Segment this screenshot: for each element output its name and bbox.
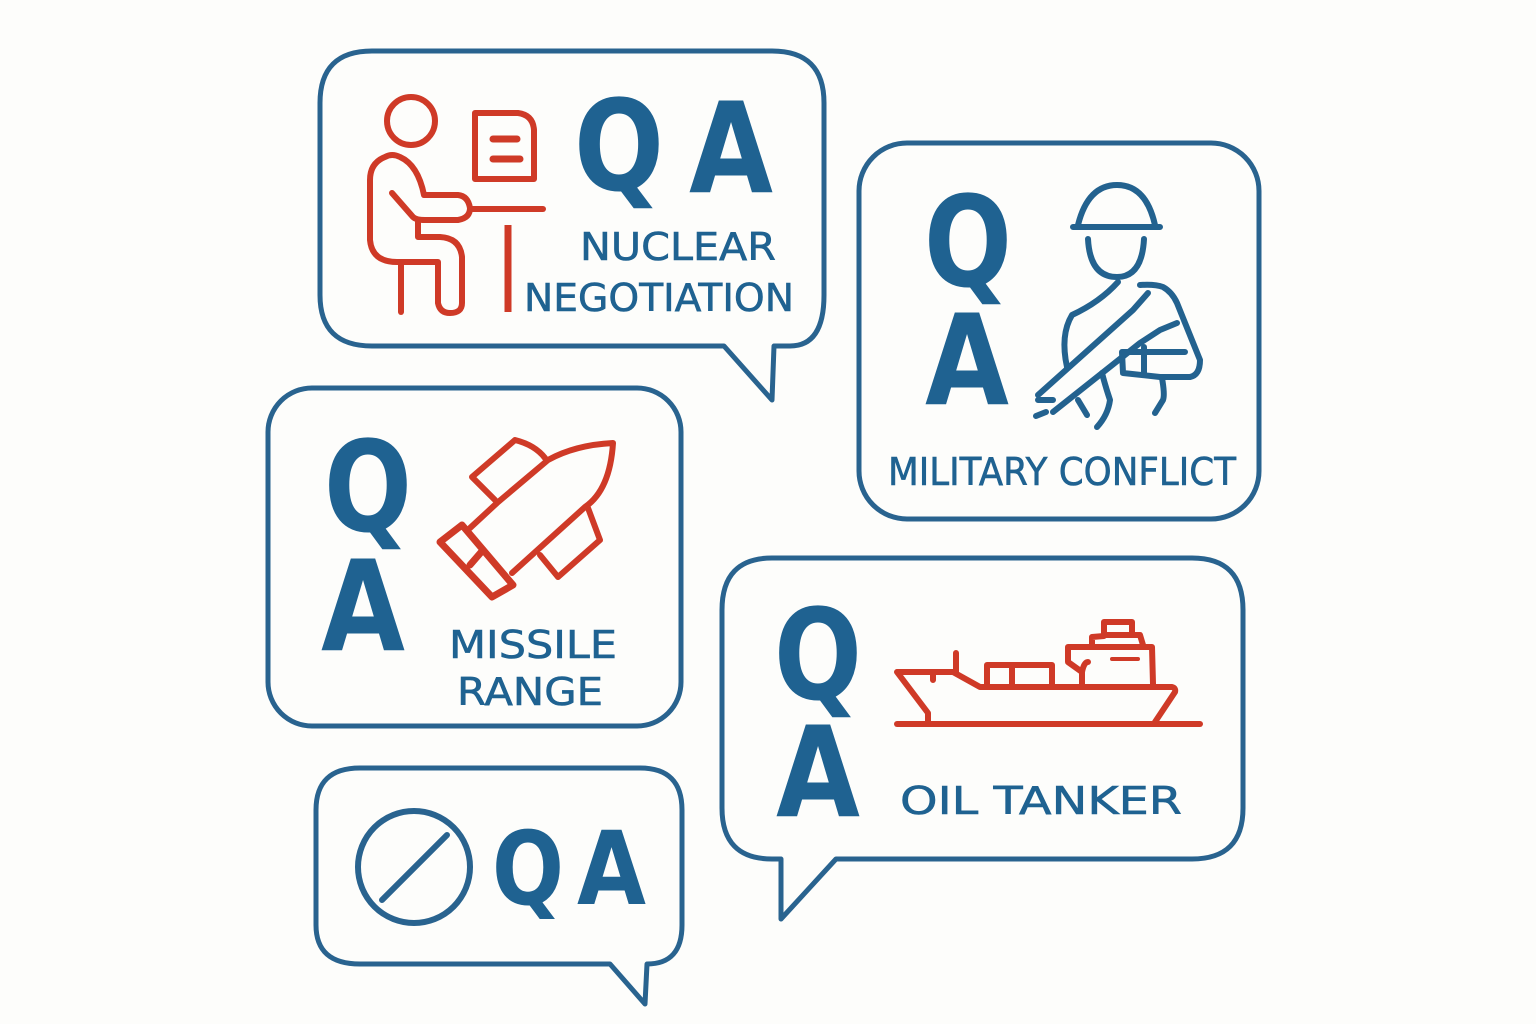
- label: nuclear negotiation: NUCLEAR: [580, 225, 776, 269]
- bubble outline: [859, 143, 1259, 519]
- label: military conflict: MILITARY CONFLICT: [888, 450, 1237, 494]
- letter A: A: [925, 287, 1009, 434]
- letter Q: Q: [774, 582, 862, 729]
- letter Q: Q: [574, 73, 664, 220]
- bubble outline: [316, 768, 682, 1004]
- letter A: A: [577, 810, 646, 929]
- label: missile range: [449, 623, 617, 714]
- letter Q: Q: [924, 169, 1012, 316]
- panel: oil tanker: [722, 558, 1243, 919]
- letter Q: Q: [324, 414, 412, 561]
- icon: soldier with rifle: [1036, 185, 1200, 427]
- panel: missile range: [268, 388, 681, 726]
- icon: oil tanker: [897, 622, 1200, 724]
- letter Q: Q: [492, 810, 564, 929]
- label: missile range: RANGE: [457, 670, 603, 714]
- label: nuclear negotiation: NEGOTIATION: [524, 276, 794, 320]
- label: oil tanker: OIL TANKER: [900, 779, 1182, 823]
- panel: military conflict: [859, 143, 1259, 519]
- icon: person at desk with document: [370, 97, 543, 313]
- icon: prohibition sign: [358, 811, 470, 923]
- speech bubble outline: [320, 51, 824, 400]
- icon: missile: [440, 440, 613, 597]
- bubble outline: [268, 388, 681, 726]
- panel: nuclear negotiation: [320, 51, 824, 400]
- label: nuclear negotiation: [524, 225, 794, 320]
- letter A: A: [689, 75, 773, 222]
- panel: prohibited: [316, 768, 682, 1004]
- bubble outline: [722, 558, 1243, 919]
- label: missile range: MISSILE: [449, 623, 617, 667]
- letter A: A: [321, 533, 405, 680]
- letter A: A: [776, 699, 860, 846]
